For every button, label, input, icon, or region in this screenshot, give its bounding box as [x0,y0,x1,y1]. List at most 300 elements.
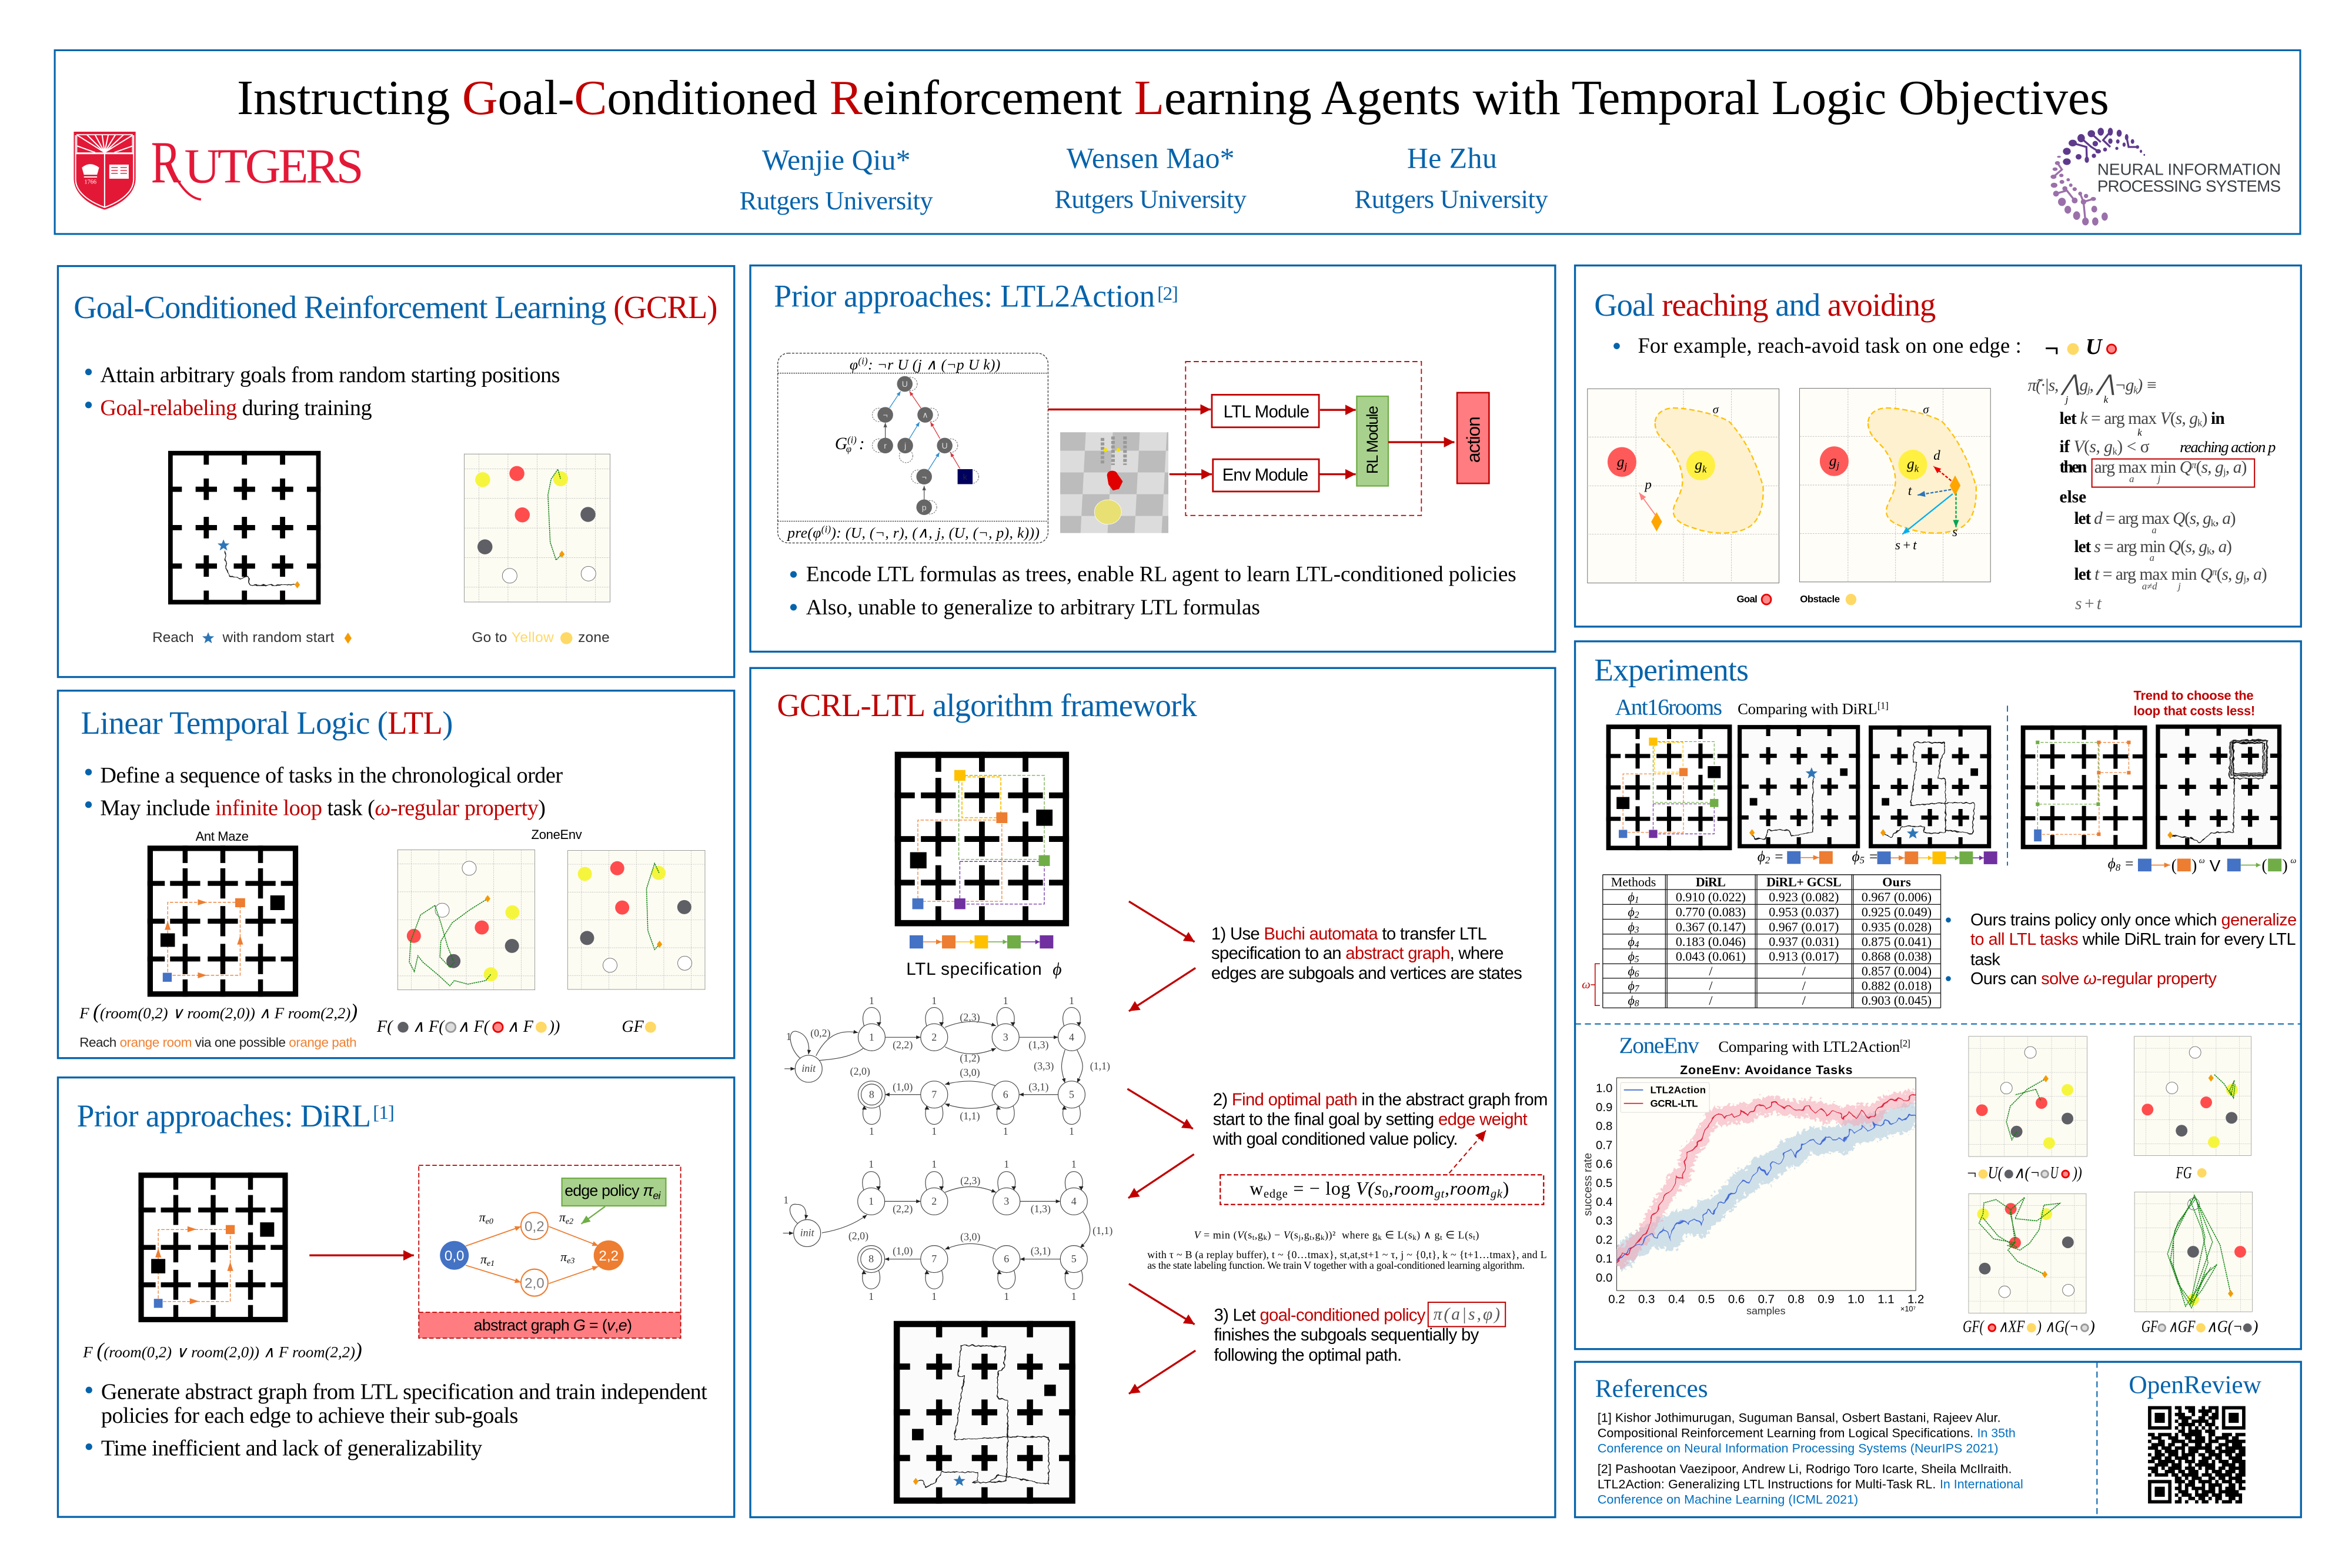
plot: reaching [1587,389,1779,583]
automaton: optimal path graph: (3,0) [960,1231,980,1243]
results table: 0.857 (0.004) [1862,964,1932,978]
series: LTL2Action line [1616,1114,1916,1262]
heading: references: References [1595,1375,1708,1403]
plot: reaching: g [1617,453,1624,470]
formula: GF multi goal: ) [2089,1318,2095,1336]
bullets: LTL: May include infinite loop task (ω-regular property) [100,795,546,820]
LTL formula tree box: : ¬r U (j ∧ (¬p U k)) [868,356,1000,373]
formula: F sequence [376,1018,560,1036]
results table: 1 [1635,895,1639,905]
label: Ant Maze: Ant Maze [196,829,249,844]
x axis labels [1608,1293,1924,1316]
caption: reach with random start: with random start [222,630,335,646]
algorithm: ) ≡ [2136,376,2157,395]
results table: ϕ [1628,890,1635,904]
results table: / [1709,978,1713,993]
bullets: GCRL: Goal-relabeling during training [100,396,372,420]
algorithm: ( [2196,458,2201,477]
results table: 7 [1635,984,1640,994]
formula: phi5: 5 [1860,855,1865,866]
subheading: Ant16rooms: Comparing with DiRL [1738,700,1877,718]
results table: 0.937 (0.031) [1769,934,1839,949]
chart legend: LTL2Action [1651,1085,1706,1096]
results table: ϕ [1628,964,1635,978]
automaton: full abstract graph [784,995,1110,1137]
results table: 0.923 (0.082) [1769,890,1839,904]
caption: go to yellow zone: Yellow [512,630,554,646]
x axis labels: 0.5 [1698,1293,1715,1306]
formula: GF yellow [622,1018,656,1036]
step 2 text: start to the final goal by setting edge weight [1213,1109,1528,1129]
panel: goal reaching and avoiding [1575,266,2301,627]
pipeline arrows [1048,409,1454,474]
logo: Rutgers: R [151,130,181,196]
value function math: as the state labeling function. We train V together with a goal-conditioned learning algorithm. [1147,1259,1525,1271]
graph nodes: 0,2 [524,1219,544,1235]
x axis labels: 0.3 [1638,1293,1655,1306]
edge weight formula: edge [1264,1188,1288,1201]
automaton: optimal path graph: (3,1) [1031,1245,1051,1258]
algorithm: ( [2217,565,2222,584]
automaton: full abstract graph: (1,1) [960,1110,980,1122]
edge weight formula: ,room [1389,1178,1434,1199]
algorithm: ) [2261,565,2267,584]
formula: reach avoid: U [2050,1164,2059,1182]
policy labels: π [479,1211,486,1225]
y axis labels: 0.7 [1596,1139,1612,1152]
panel: references and open review [1575,1362,2301,1517]
algorithm: , a [2215,509,2231,528]
tree nodes: U [942,441,948,450]
series: GCRL-LTL line [1616,1095,1916,1266]
LTL formula tree box: (i) [847,434,857,446]
results table: 0.770 (0.083) [1676,905,1746,920]
step 3 text: finishes the subgoals sequentially by [1214,1325,1479,1345]
bullets: results: Ours can solve ω-regular property [1970,969,2217,988]
LTL formula tree box: : [859,434,865,453]
algorithm: , a [2211,537,2227,556]
value function math: t [1473,1233,1475,1242]
LTL formula tree box: G [835,434,847,453]
maze: final rollout [894,1321,1075,1504]
x axis labels: ×10⁷ [1900,1304,1916,1313]
automaton: optimal path graph: 6 [1004,1253,1009,1265]
algorithm: a [2129,473,2134,484]
author 1: Wenjie Qiu* [762,143,910,176]
author 1: Rutgers University [740,186,933,215]
algorithm: ) < σ [2117,437,2150,456]
algorithm: ) [2230,509,2236,528]
RL module [1357,396,1388,486]
step 3 text: π(a|s,φ) [1434,1305,1500,1323]
algorithm: k [2113,446,2118,457]
results table: 2 [1635,910,1639,920]
bullets: GCRL [85,363,560,420]
maze: DiRL room path [138,1172,288,1322]
divider [2007,706,2008,865]
formula: phi8: V [2210,857,2221,875]
formula: phi5: ϕ [1852,848,1860,865]
formula: GF yellow: GF [622,1018,644,1036]
automaton: optimal path graph: 8 [868,1253,874,1265]
heading: DiRL: [1] [373,1102,395,1124]
x axis labels: 0.8 [1788,1293,1805,1306]
heading: open review: OpenReview [2129,1370,2262,1399]
tree nodes [877,376,973,515]
y axis labels [1582,1082,1612,1285]
arrows: step connectors [1127,901,1195,1394]
automaton: full abstract graph: (2,2) [893,1039,913,1051]
algorithm: j [2064,394,2069,405]
formula: GF multi goal: ) ∧G(¬ [2036,1318,2079,1336]
QR code [2148,1406,2246,1503]
edge weight formula: gt [1435,1188,1445,1201]
step 1 text: specification to an abstract graph, where [1211,944,1504,963]
automaton: full abstract graph: 4 [1069,1031,1074,1043]
algorithm: j [2223,466,2226,477]
plot: avoiding: s [1952,524,1957,539]
callout: trend [2134,688,2255,718]
policy labels: e2 [566,1216,573,1226]
callout: trend: Trend to choose the [2134,688,2254,703]
algorithm: let t = arg max min Q [2074,565,2213,584]
plot: reaching: σ [1713,403,1719,416]
automaton: full abstract graph: 1 [1003,1125,1008,1137]
subheading: Ant16rooms: [1] [1877,700,1889,711]
modules dashed box [1185,362,1421,516]
plot: reaching: g [1695,456,1702,473]
maze: ant maze with orange path [148,845,298,997]
plot: avoiding: s + t [1895,538,1917,553]
arrow: maze to graph [309,1255,414,1256]
automaton: full abstract graph: 1 [869,1125,874,1137]
algorithm: then [2060,457,2087,476]
automaton: full abstract graph: (0,2) [810,1027,831,1039]
algorithm: k [2104,394,2109,405]
edge weight formula: ) [1503,1178,1509,1199]
results table: ϕ [1628,934,1635,949]
formula: F sequence: F( [376,1018,393,1036]
automaton: full abstract graph: (1,3) [1028,1039,1048,1051]
automaton: full abstract graph: (3,0) [960,1066,980,1079]
heading: goal reaching: Goal reaching and avoiding [1594,287,1936,323]
y axis labels: 0.8 [1596,1120,1612,1133]
author 3 [1355,142,1548,213]
automaton: full abstract graph: (2,0) [850,1065,870,1078]
zone plot: sequence [397,850,535,990]
results table: / [1709,964,1713,978]
results table: 8 [1635,999,1639,1009]
automaton: full abstract graph: (2,3) [960,1011,980,1024]
LTL formula tree box: pre(φ [787,524,821,541]
RL module: RL Module [1364,406,1381,474]
LTL formula tree box: (i) [858,356,868,367]
author 2: Rutgers University [1054,184,1247,213]
algorithm: j [2243,573,2246,584]
bullet: reach-avoid: For example, reach-avoid task on one edge : [1638,334,2022,357]
series: GCRL-LTL band [1616,1095,1916,1266]
heading: LTL2Action: Prior approaches: LTL2Action [774,278,1155,313]
plot: avoiding: g [1829,452,1836,469]
formula: GF avoid: ∧GF [2169,1318,2196,1336]
tree nodes: ∧ [922,410,928,420]
algorithm: , [2090,376,2097,395]
y axis labels: 0.9 [1596,1101,1612,1114]
legend: goal and obstacle: Goal [1737,593,1758,604]
title: Instructing Goal-Conditioned Reinforcement Learning Agents with Temporal Logic Objectives [237,71,2109,125]
x axis labels: 1.1 [1877,1293,1895,1306]
algorithm: j [2177,581,2181,592]
tree nodes: ¬ [922,472,927,482]
logo: NeurIPS: NEURAL INFORMATION [2097,160,2281,178]
results table: 0.925 (0.049) [1862,905,1932,920]
formula: phi8: ( [2171,857,2177,875]
results table [1603,875,1941,1009]
zone plot: reach avoid trajectory [1969,1037,2087,1156]
formula: FG: FG [2176,1164,2192,1182]
bullet: reach-avoid: U [2086,335,2103,359]
edge weight formula: ,room [1445,1178,1490,1199]
zone plot: go to yellow [465,454,610,602]
step 1 text [1211,924,1522,983]
formula: phi2: = [1770,848,1784,865]
value function math: ,g [1255,1229,1263,1241]
y axis labels: 0.6 [1596,1158,1612,1171]
automaton: full abstract graph: 1 [786,1031,791,1042]
results table: Methods [1611,875,1656,890]
algorithm: ) [2241,458,2247,477]
formula: F sequence: ∧ F( [413,1018,445,1036]
heading: LTL: Linear Temporal Logic (LTL) [81,705,453,741]
automaton: optimal path graph: (1,3) [1031,1203,1051,1215]
x axis labels: 1.2 [1907,1293,1924,1306]
graph nodes [440,1212,624,1296]
zone plot: GF avoid [2134,1192,2252,1312]
bullets: results: to all LTL tasks while DiRL train for every LTL [1970,930,2296,949]
value function math: ) − [1267,1229,1283,1242]
value function math: V = min (V(s [1194,1229,1252,1241]
plot: avoiding: g [1907,455,1915,472]
results table: 0.967 (0.006) [1862,890,1932,904]
algorithm: let d = arg max Q(s, g [2074,509,2211,528]
plot: avoiding [1799,388,1990,582]
value function math: t [1252,1233,1255,1242]
results table: Ours [1882,875,1911,890]
value function math: t [1440,1233,1442,1242]
tree nodes: k [963,472,968,482]
formula: phi8: 8 [2116,862,2121,873]
LTL formula tree box: (i) [821,523,831,534]
value function math: with τ ~ B (a replay buffer), t ~ {0…tmax}, st,at,st+1 ~ τ, j ~ {0,t}, k ~ {t+1…tmax}, and L [1147,1249,1547,1261]
automaton: full abstract graph: 1 [1069,995,1074,1007]
algorithm: j [2086,384,2090,395]
value function math: ∈ L(s [1442,1229,1473,1242]
action box [1457,393,1489,483]
label: LTL specification: LTL specification ϕ [906,959,1062,979]
algorithm: s + t [2075,594,2102,613]
formula: GF avoid: ) [2251,1318,2258,1336]
tree nodes: j [904,441,906,450]
panel: GCRL [58,266,734,677]
abstract graph box: abstract graph G = (v,e) [474,1316,632,1334]
results table: 0.910 (0.022) [1676,890,1746,904]
results table: 0.882 (0.018) [1862,978,1932,993]
policy labels: e3 [567,1256,574,1266]
algorithm: a [2150,552,2154,563]
results table: ϕ [1628,978,1635,993]
bullets: results: Ours trains policy only once which generalize [1970,911,2297,930]
action box: action [1463,416,1484,463]
zone plot: GF multi goal [1969,1193,2086,1313]
algorithm [2028,372,2276,613]
formula: phi8: ) [2282,857,2288,875]
results table: ϕ [1628,993,1635,1008]
reference 2: LTL2Action: Generalizing LTL Instructions for Multi-Task RL. [1598,1477,1936,1491]
policy labels: π [559,1211,566,1225]
results table: 0.868 (0.038) [1862,949,1932,964]
policy labels: e0 [486,1216,493,1226]
automaton: full abstract graph: 2 [931,1031,937,1043]
edge weight formula: gk [1491,1188,1503,1201]
algorithm: k [2197,417,2203,429]
reference 1: Conference on Neural Information Processing Systems (NeurIPS 2021) [1598,1442,1998,1456]
automaton: optimal path graph: 1 [931,1290,937,1302]
bullets: GCRL: Attain arbitrary goals from random starting positions [100,363,560,387]
step 2 text [1212,1090,1548,1149]
bullets: LTL2Action: Encode LTL formulas as trees, enable RL agent to learn LTL-conditioned policies [806,562,1516,586]
formula: phi8: = [2120,855,2134,872]
bullets: DiRL [86,1380,707,1461]
results table: 0.953 (0.037) [1769,905,1839,920]
automaton: optimal path graph: 5 [1071,1253,1077,1265]
algorithm: let k = arg max V(s, g [2060,409,2198,428]
formula: phi8: ω [2199,856,2205,865]
heading: GCRL: Goal-Conditioned Reinforcement Learning (GCRL) [74,289,717,325]
heading: experiments: Experiments [1594,652,1749,687]
plot: reaching: k [1702,464,1707,475]
maze: LTL specification [895,752,1069,927]
automaton: optimal path graph: 3 [1004,1195,1009,1207]
bullets: DiRL: Generate abstract graph from LTL specification and train independent [101,1380,707,1405]
step 1 text: 1) Use Buchi automata to transfer LTL [1211,924,1487,944]
results table: DiRL+ GCSL [1766,875,1842,890]
LTL formula tree box [778,353,1048,543]
value function math: ))² where g [1325,1229,1378,1242]
reference 1: [1] Kishor Jothimurugan, Suguman Bansal, Osbert Bastani, Rajeev Alur. [1598,1410,2001,1425]
reference 2: [2] Pashootan Vaezipoor, Andrew Li, Rodrigo Toro Icarte, Sheila McIlraith. [1598,1462,2012,1476]
maze: phi5 rollout [1869,726,1991,848]
subheading: ZoneEnv: Comparing with LTL2Action [1718,1038,1900,1055]
results table: 0.935 (0.028) [1862,920,1932,934]
algorithm: k [2207,546,2212,557]
tree nodes: p [922,503,927,512]
results table: 0.967 (0.017) [1769,920,1839,934]
algorithm: a≠d [2142,581,2157,592]
automaton: optimal path graph: 1 [868,1158,874,1170]
edge policy label [562,1178,666,1206]
x axis labels: 1.0 [1847,1293,1865,1306]
automaton: optimal path graph: 1 [1004,1158,1009,1170]
subheading: Ant16rooms [1615,694,1889,720]
value function math: k [1321,1233,1325,1242]
automaton: optimal path graph: 1 [868,1195,874,1207]
algorithm: ⋀¬g [2097,372,2134,396]
value function math: t [1309,1233,1312,1242]
automaton: full abstract graph: 1 [1003,995,1008,1007]
bullet: reach-avoid: ¬ [2044,335,2059,363]
panel: LTL2Action [750,266,1555,651]
automaton: optimal path graph: 1 [1071,1158,1077,1170]
formula: phi8: ω [2290,856,2296,865]
Env module: Env Module [1222,465,1308,484]
edge policy label: ei [653,1189,662,1201]
automaton: optimal path graph: 1 [1004,1290,1009,1302]
formula: phi8: ) [2191,857,2197,875]
automaton: full abstract graph: (3,1) [1028,1081,1048,1094]
edge weight formula: = − log [1288,1178,1355,1199]
algorithm: s, g [2201,458,2224,477]
reference 1: Compositional Reinforcement Learning from Logical Specifications. [1598,1426,1973,1440]
formula: reach avoid: ¬ [1967,1165,1976,1183]
bullets: LTL2Action: Also, unable to generalize to arbitrary LTL formulas [806,596,1260,620]
plot: avoiding: t [1908,483,1912,498]
formula: GF multi goal: GF( [1963,1318,1984,1336]
formula: GF avoid: ∧G(¬ [2207,1318,2243,1336]
value function math: k [1264,1233,1268,1242]
plot: reaching: j [1623,460,1627,472]
algorithm: k [2137,427,2142,438]
y axis labels: 0.4 [1596,1196,1612,1209]
author 3: He Zhu [1407,142,1497,175]
caption: go to yellow zone [472,630,610,646]
panel: LTL [58,691,734,1058]
policy labels: π [560,1250,567,1264]
panel: GCRL-LTL framework [750,668,1555,1517]
LTL module: LTL Module [1224,402,1309,422]
automaton: full abstract graph: 5 [1069,1088,1074,1100]
bullets: LTL2Action [790,562,1516,620]
author 1 [740,143,933,215]
formula: phi5: = [1865,848,1879,865]
caption: reach with random start [152,630,352,646]
formula: F sequence: )) [548,1018,560,1036]
algorithm: , a [2246,565,2262,584]
step 3 text [1214,1302,1505,1365]
panel: experiments [1575,641,2301,1349]
y axis labels: 0.1 [1596,1253,1612,1266]
automaton: full abstract graph: init [801,1062,816,1074]
formula: phi5 [1852,848,1997,866]
value function math: ∈ L(s [1382,1229,1412,1242]
y axis labels: success rate [1582,1153,1595,1216]
y axis labels: 0.3 [1596,1215,1612,1228]
algorithm: s, g [2221,565,2244,584]
edge policy label: edge policy π [564,1182,653,1199]
reference 2 [1598,1462,2023,1506]
results table: / [1709,993,1713,1008]
edge weight formula: w [1250,1178,1263,1199]
results table: 0.043 (0.061) [1676,949,1746,964]
tree nodes: r [884,441,887,450]
graph nodes: 2,0 [524,1276,544,1292]
policy labels: e1 [487,1259,495,1268]
series: LTL2Action band [1616,1114,1916,1262]
plot: avoiding: σ [1923,403,1929,416]
caption: orange room: Reach orange room via one possible orange path [79,1035,357,1049]
automaton: optimal path graph: 1 [1071,1290,1077,1302]
graph nodes: 0,0 [445,1248,465,1264]
maze: phi8 task [2021,726,2147,849]
